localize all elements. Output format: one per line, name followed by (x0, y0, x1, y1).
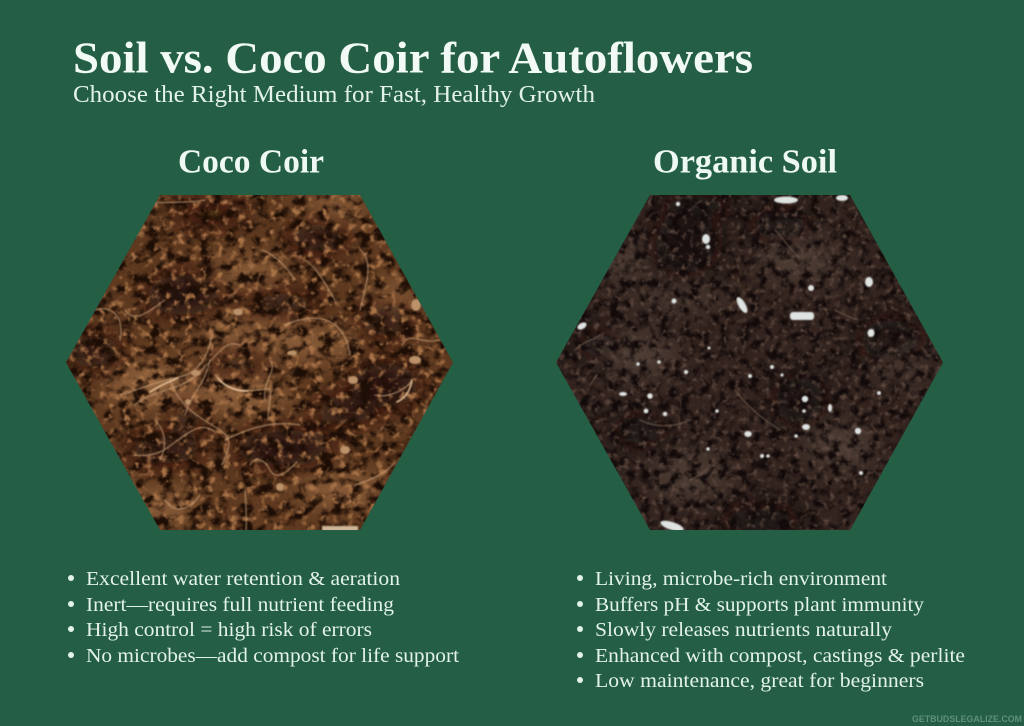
subtitle: Choose the Right Medium for Fast, Healthy Growth (73, 81, 595, 108)
hexagon photo: coco coir texture (60, 190, 460, 535)
title: Soil vs. Coco Coir for Autoflowers (73, 32, 753, 82)
heading: Organic Soil: Organic Soil (653, 144, 837, 180)
bullet list: organic soil: Living, microbe-rich environment (595, 569, 888, 590)
bullet list: coco coir (68, 569, 460, 667)
heading: Coco Coir: Coco Coir (178, 144, 324, 180)
bullet list: coco coir: Inert—requires full nutrient feeding (86, 595, 394, 616)
bullet list: coco coir: Excellent water retention & aeration (86, 569, 400, 590)
bullet list: organic soil: Slowly releases nutrients naturally (595, 620, 892, 641)
bullet list: organic soil (577, 569, 965, 692)
bullet list: coco coir: High control = high risk of errors (86, 620, 372, 641)
bullet list: organic soil: Buffers pH & supports plant immunity (595, 595, 924, 616)
bullet list: organic soil: Enhanced with compost, castings & perlite (595, 646, 965, 667)
bullet list: organic soil: Low maintenance, great for beginners (595, 671, 924, 692)
hexagon photo: organic soil texture (550, 190, 950, 535)
bullet list: coco coir: No microbes—add compost for life support (86, 646, 460, 667)
